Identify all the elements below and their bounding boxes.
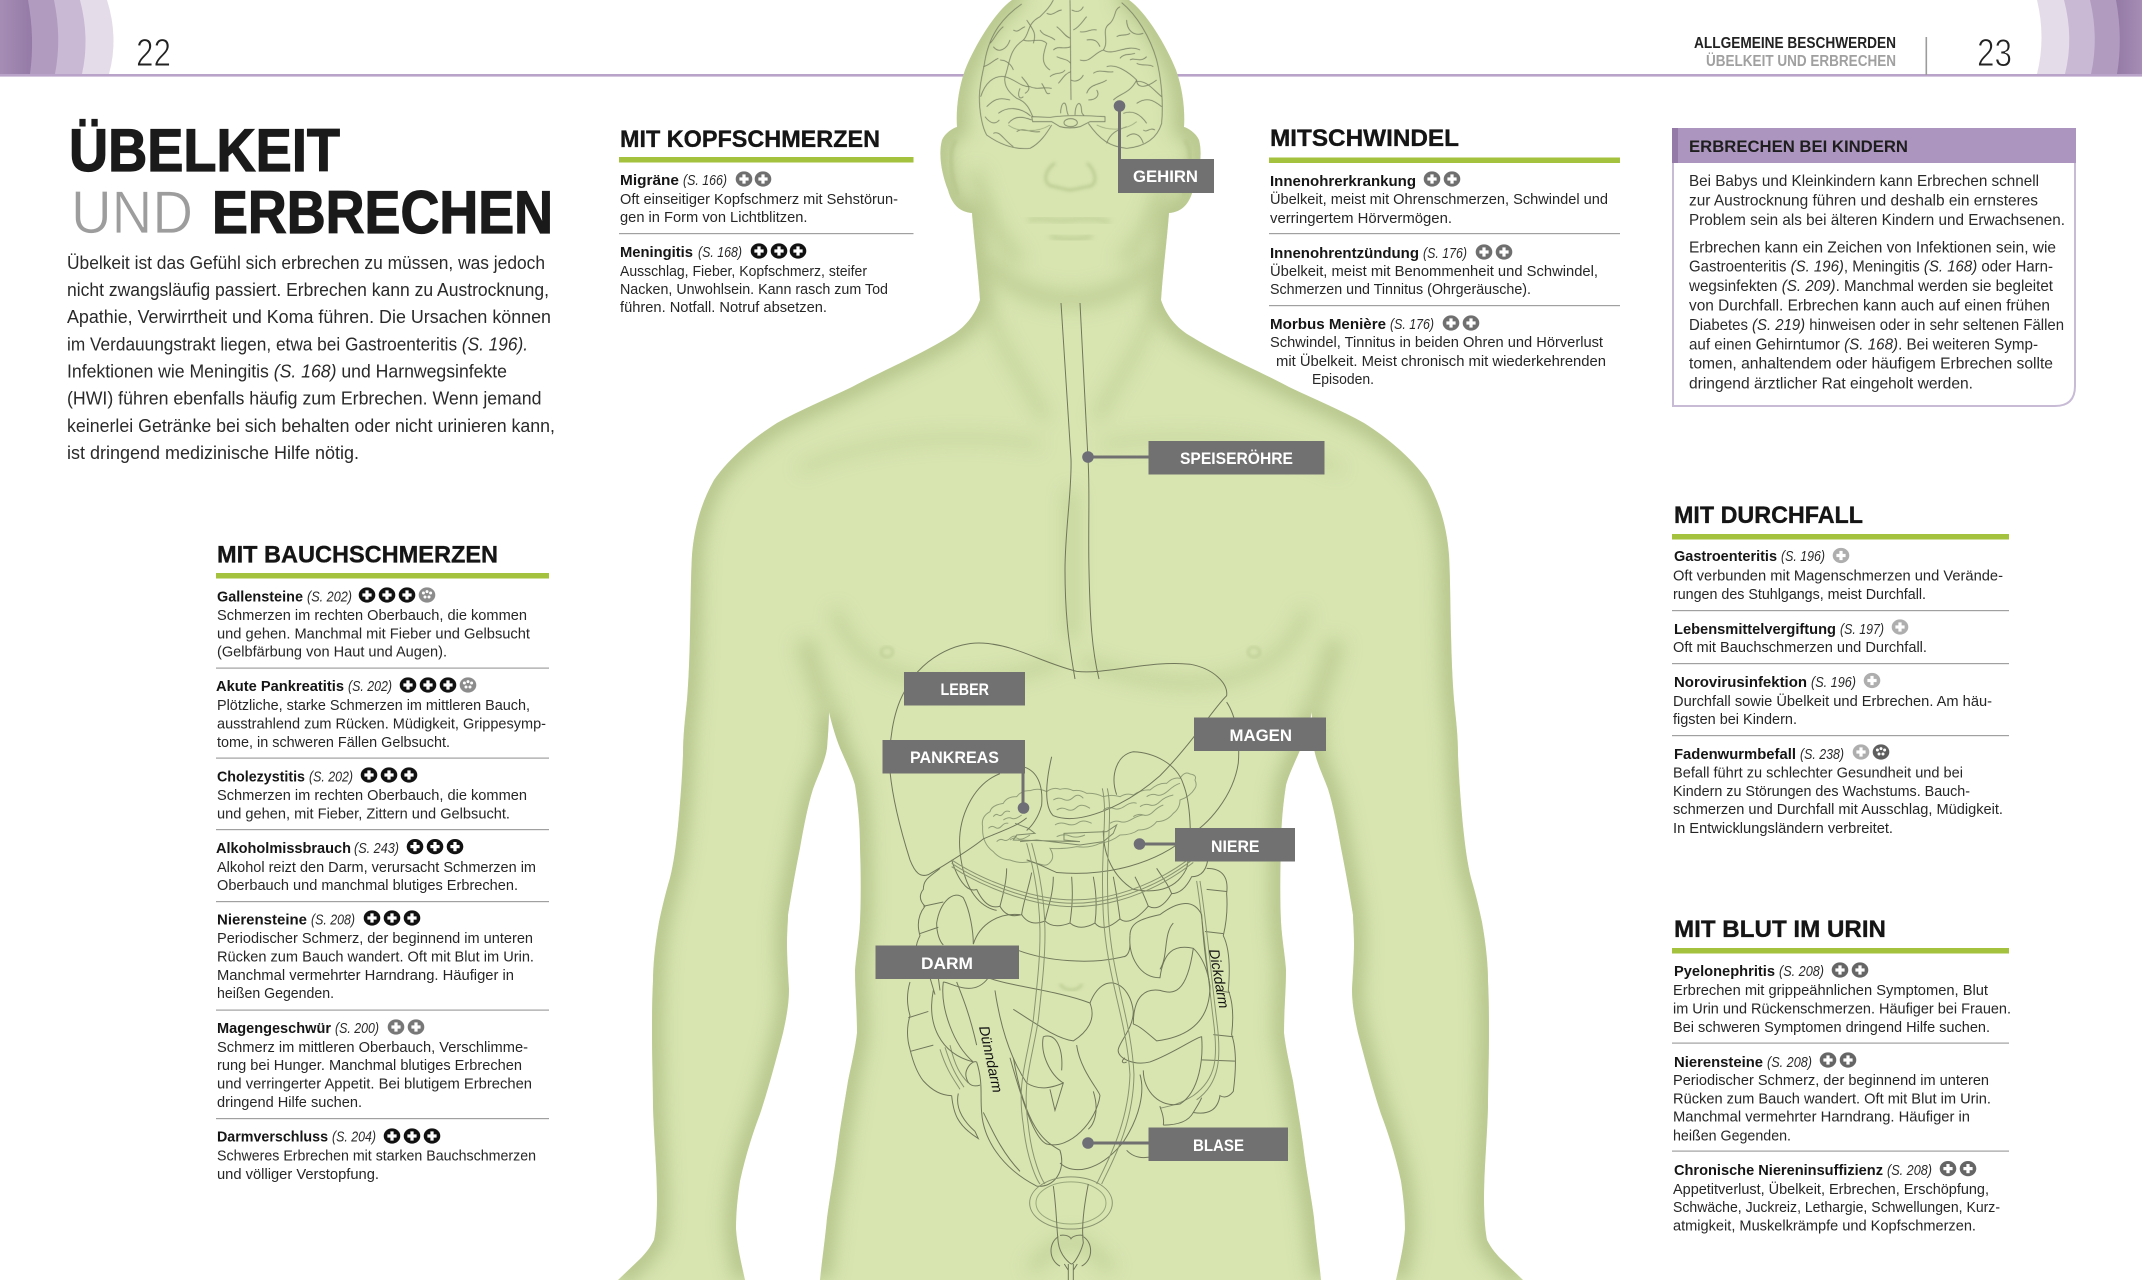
entry: Magengeschwür: und verringerter Appetit. Bei blutigem Erbrechen [217, 1076, 532, 1092]
entry: Pyelonephritis [1673, 962, 2011, 1036]
entry: Innenohrentzündung: Schmerzen und Tinnitus (Ohrgeräusche). [1270, 281, 1531, 298]
transverse colon [977, 856, 1208, 927]
heading: Mit Schwindel: MITSCHWINDEL [1270, 125, 1459, 152]
entry: Magengeschwür: Schmerz im mittleren Oberbauch, Verschlimme- [217, 1039, 528, 1056]
entry: Gastroenteritis [1673, 548, 2003, 603]
box text: tomen, anhaltendem oder häufigem Erbrechen sollte [1689, 356, 2053, 373]
entry: Nierensteine: Periodischer Schmerz, der beginnend im unteren [1673, 1072, 1989, 1089]
entry: Morbus Menière: (S. 176) [1390, 317, 1434, 333]
entry: Meningitis [620, 243, 888, 316]
entry: Nierensteine: Nierensteine [217, 912, 307, 929]
entry: Cholezystitis [217, 767, 527, 822]
entry: Gastroenteritis: rungen des Stuhlgangs, meist Durchfall. [1673, 586, 1926, 603]
entry: Cholezystitis: und gehen, mit Fieber, Zittern und Gelbsucht. [217, 805, 510, 822]
entry: Fadenwurmbefall: Befall führt zu schlechter Gesundheit und bei [1673, 764, 1963, 782]
intro text: ist dringend medizinische Hilfe nötig. [67, 442, 359, 463]
label: Speiseröhre [1082, 441, 1324, 474]
entry: Alkoholmissbrauch: Oberbauch und manchmal blutiges Erbrechen. [217, 877, 518, 894]
panel: Mit Blut im Urin [1672, 916, 2011, 1235]
organ name: Dünndarm: Dünndarm [975, 1025, 1005, 1094]
entry: Darmverschluss: Schweres Erbrechen mit starken Bauchschmerzen [217, 1148, 536, 1164]
title [69, 117, 553, 246]
heading: Mit Kopfschmerzen: MIT KOPFSCHMERZEN [620, 126, 880, 153]
entry: Innenohrerkrankung: Innenohrerkrankung [1270, 173, 1416, 190]
heading: Mit Blut im Urin: MIT BLUT IM URIN [1674, 916, 1886, 943]
entry: Alkoholmissbrauch: Alkoholmissbrauch [216, 840, 351, 857]
entry: Nierensteine: (S. 208) [311, 913, 355, 929]
entry: Pyelonephritis: Bei schweren Symptomen dringend Hilfe suchen. [1673, 1019, 1990, 1036]
entry: Gastroenteritis: (S. 196) [1781, 549, 1825, 565]
box text: Diabetes (S. 219) hinweisen oder in sehr seltenen Fällen [1689, 317, 2064, 334]
entry: Chronische Niereninsuffizienz: Schwäche, Juckreiz, Lethargie, Schwellungen, Kurz- [1673, 1199, 2000, 1216]
entry: Norovirusinfektion: Norovirusinfektion [1674, 674, 1807, 691]
entry: Alkoholmissbrauch: Alkohol reizt den Darm, verursacht Schmerzen im [217, 859, 536, 876]
running head [1694, 35, 1927, 75]
entry: Migräne: (S. 166) [683, 173, 727, 189]
running head: ÜBELKEIT UND ERBRECHEN [1706, 53, 1896, 70]
label: Leber: LEBER [940, 681, 989, 699]
label: Darm [876, 946, 1019, 979]
label: Gehirn [1114, 100, 1214, 193]
intro text: Apathie, Verwirrtheit und Koma führen. Die Ursachen können [67, 306, 551, 327]
right kidney and gallbladder [960, 774, 1000, 910]
box text: von Durchfall. Erbrechen kann auch auf einen frühen [1689, 297, 2050, 314]
label: Pankreas: PANKREAS [910, 749, 999, 767]
entry: Magengeschwür [217, 1019, 532, 1111]
entry: Akute Pankreatitis: Plötzliche, starke Schmerzen im mittleren Bauch, [217, 697, 530, 714]
entry: Fadenwurmbefall: schmerzen und Durchfall mit Ausschlag, Müdigkeit. [1673, 801, 2003, 818]
entry: Gallensteine: (Gelbfärbung von Haut und Augen). [217, 644, 447, 661]
panel: Mit Kopfschmerzen [619, 126, 914, 316]
panel: Mit Bauchschmerzen [216, 542, 549, 1183]
entry: Fadenwurmbefall [1673, 744, 2003, 837]
entry: Chronische Niereninsuffizienz: (S. 208) [1887, 1163, 1932, 1179]
heading: Mit Bauchschmerzen: MIT BAUCHSCHMERZEN [217, 542, 498, 568]
entry: Innenohrerkrankung: verringertem Hörvermögen. [1270, 210, 1452, 227]
box text: wegsinfekten (S. 209). Manchmal werden sie begleitet [1688, 278, 2054, 295]
entry: Darmverschluss: (S. 204) [332, 1130, 376, 1146]
entry: Morbus Menière: mit Übelkeit. Meist chronisch mit wiederkehrenden [1276, 352, 1606, 370]
entry: Lebensmittelvergiftung: Oft mit Bauchschmerzen und Durchfall. [1673, 639, 1927, 656]
entry: Innenohrerkrankung: Übelkeit, meist mit Ohrenschmerzen, Schwindel und [1270, 190, 1608, 208]
entry: Norovirusinfektion: figsten bei Kindern. [1673, 711, 1797, 728]
entry: Innenohrentzündung: Übelkeit, meist mit Benommenheit und Schwindel, [1270, 262, 1598, 280]
label: Gehirn: GEHIRN [1133, 168, 1198, 186]
entry: Morbus Menière: Episoden. [1312, 371, 1374, 388]
box text: zur Austrocknung führen und deshalb ein ernsteres [1689, 193, 2038, 210]
intro text: Infektionen wie Meningitis (S. 168) und Harnwegsinfekte [67, 360, 507, 382]
entry: Nierensteine [217, 910, 534, 1002]
entry: Migräne [620, 171, 898, 226]
panel: Mit Durchfall [1672, 502, 2009, 837]
entry: Norovirusinfektion: (S. 196) [1811, 675, 1856, 691]
label: Blase [1082, 1128, 1288, 1161]
title: UND [71, 179, 193, 246]
decoration: right purple tabs [2037, 0, 2142, 74]
entry: Darmverschluss: Darmverschluss [217, 1128, 328, 1146]
face details [881, 140, 1260, 990]
entry: Cholezystitis: Cholezystitis [217, 768, 305, 786]
intro text: im Verdauungstrakt liegen, etwa bei Gastroenteritis (S. 196). [67, 334, 528, 354]
organ name: Dickdarm: Dickdarm [1205, 948, 1231, 1010]
entry: Chronische Niereninsuffizienz [1673, 1161, 2000, 1235]
ureters [1021, 843, 1040, 1184]
entry: Gallensteine [217, 587, 531, 661]
entry: Meningitis: (S. 168) [698, 245, 742, 261]
stomach [1027, 702, 1239, 873]
title: ERBRECHEN [212, 179, 553, 246]
label: Speiseröhre: SPEISERÖHRE [1180, 449, 1293, 468]
entry: Meningitis: Meningitis [620, 244, 693, 261]
running head: ALLGEMEINE BESCHWERDEN [1694, 35, 1896, 52]
ascending colon [907, 868, 952, 1096]
entry: Morbus Menière [1270, 315, 1606, 388]
entry: Chronische Niereninsuffizienz: atmigkeit, Muskelkrämpfe und Kopfschmerzen. [1673, 1218, 1976, 1235]
entry: Magengeschwür: rung bei Hunger. Manchmal blutiges Erbrechen [217, 1057, 522, 1074]
entry: Akute Pankreatitis: (S. 202) [348, 679, 392, 695]
entry: Pyelonephritis: Erbrechen mit grippeähnlichen Symptomen, Blut [1673, 982, 1989, 999]
entry: Gallensteine: Schmerzen im rechten Oberbauch, die kommen [217, 607, 527, 624]
small intestine [973, 914, 1020, 944]
entry: Darmverschluss [217, 1128, 536, 1183]
bladder [1030, 1177, 1112, 1229]
entry: Pyelonephritis: Pyelonephritis [1674, 963, 1775, 980]
entry: Meningitis: Ausschlag, Fieber, Kopfschmerz, steifer [620, 263, 867, 280]
entry: Darmverschluss: und völliger Verstopfung. [217, 1166, 379, 1183]
entry: Akute Pankreatitis: tome, in schweren Fällen Gelbsucht. [217, 734, 450, 751]
intro text: (HWI) führen ebenfalls häufig zum Erbrechen. Wenn jemand [67, 388, 542, 408]
label: Niere [1134, 828, 1295, 862]
entry: Alkoholmissbrauch [216, 839, 536, 894]
entry: Chronische Niereninsuffizienz: Chronische Niereninsuffizienz [1674, 1162, 1883, 1179]
intro text: keinerlei Getränke bei sich behalten oder nicht urinieren kann, [67, 415, 555, 436]
pancreas [982, 773, 1196, 865]
entry: Morbus Menière: Morbus Menière [1270, 316, 1386, 333]
entry: Magengeschwür: dringend Hilfe suchen. [217, 1094, 362, 1111]
entry: Lebensmittelvergiftung [1673, 619, 1927, 656]
entry: Magengeschwür: (S. 200) [335, 1021, 379, 1037]
entry: Gallensteine: (S. 202) [307, 590, 352, 606]
box text: Bei Babys und Kleinkindern kann Erbrechen schnell [1689, 173, 2039, 190]
entry: Lebensmittelvergiftung: Lebensmittelvergiftung [1674, 621, 1836, 638]
box text: dringend ärztlicher Rat eingeholt werden. [1689, 375, 1973, 392]
entry: Cholezystitis: (S. 202) [309, 770, 353, 786]
label: Magen [1194, 718, 1326, 751]
title: ÜBELKEIT [69, 117, 340, 184]
entry: Meningitis: Nacken, Unwohlsein. Kann rasch zum Tod [620, 281, 888, 298]
entry: Gastroenteritis: Oft verbunden mit Magenschmerzen und Verände- [1673, 568, 2003, 585]
label: Darm: DARM [921, 955, 973, 973]
box text: Problem sein als bei älteren Kindern und Erwachsenen. [1689, 212, 2065, 229]
entry: Akute Pankreatitis: Akute Pankreatitis [216, 678, 344, 695]
entry: Pyelonephritis: (S. 208) [1779, 964, 1824, 980]
panel: Mit Schwindel [1269, 125, 1620, 388]
label: Leber [904, 672, 1025, 706]
entry: Nierensteine: Rücken zum Bauch wandert. Oft mit Blut im Urin. [1673, 1091, 1991, 1108]
box text: Gastroenteritis (S. 196), Meningitis (S. 168) oder Harn- [1689, 259, 2053, 276]
intro text: nicht zwangsläufig passiert. Erbrechen kann zu Austrocknung, [67, 279, 549, 300]
entry: Nierensteine: Periodischer Schmerz, der beginnend im unteren [217, 930, 533, 947]
box text: Erbrechen kann ein Zeichen von Infektionen sein, wie [1689, 239, 2056, 256]
box text [1688, 173, 2065, 392]
entry: Lebensmittelvergiftung: (S. 197) [1840, 622, 1884, 638]
intro text [67, 252, 555, 463]
entry: Nierensteine: Manchmal vermehrter Harndrang. Häufiger in [1673, 1109, 1970, 1126]
entry: Chronische Niereninsuffizienz: Appetitverlust, Übelkeit, Erbrechen, Erschöpfung, [1673, 1180, 1989, 1198]
label: Blase: BLASE [1193, 1137, 1244, 1155]
entry: Gallensteine: Gallensteine [217, 588, 303, 606]
heading: Erbrechen bei Kindern: ERBRECHEN BEI KINDERN [1689, 137, 1908, 156]
left kidney / spleen [1103, 752, 1190, 891]
entry: Fadenwurmbefall: Fadenwurmbefall [1674, 746, 1796, 763]
entry: Cholezystitis: Schmerzen im rechten Oberbauch, die kommen [217, 787, 527, 804]
entry: Magengeschwür: Magengeschwür [217, 1020, 331, 1037]
entry: Migräne: Migräne [620, 172, 679, 189]
entry: Meningitis: führen. Notfall. Notruf absetzen. [620, 299, 827, 316]
label: Niere: NIERE [1211, 838, 1260, 856]
label: Pankreas [882, 740, 1029, 814]
entry: Migräne: Oft einseitiger Kopfschmerz mit Sehstörun- [620, 191, 898, 208]
entry: Norovirusinfektion: Durchfall sowie Übelkeit und Erbrechen. Am häu- [1673, 692, 1992, 710]
entry: Gastroenteritis: Gastroenteritis [1674, 548, 1777, 565]
entry: Alkoholmissbrauch: (S. 243) [354, 841, 399, 857]
label: Magen: MAGEN [1230, 727, 1292, 745]
entry: Fadenwurmbefall: In Entwicklungsländern verbreitet. [1673, 820, 1893, 837]
entry: Akute Pankreatitis [216, 677, 546, 751]
header rule [0, 74, 2142, 77]
entry: Migräne: gen in Form von Lichtblitzen. [620, 209, 808, 226]
box text: auf einen Gehirntumor (S. 168). Bei weiteren Symp- [1689, 336, 2038, 353]
entry: Gallensteine: und gehen. Manchmal mit Fieber und Gelbsucht [217, 625, 531, 642]
descending colon [1163, 868, 1235, 1125]
entry: Nierensteine: Rücken zum Bauch wandert. Oft mit Blut im Urin. [217, 948, 534, 966]
entry: Fadenwurmbefall: Kindern zu Störungen des Wachstums. Bauch- [1673, 783, 1970, 800]
entry: Innenohrentzündung: (S. 176) [1423, 246, 1467, 262]
entry: Akute Pankreatitis: ausstrahlend zum Rücken. Müdigkeit, Grippesymp- [217, 716, 546, 733]
entry: Nierensteine: Nierensteine [1674, 1054, 1763, 1071]
digestive organs line drawing [890, 643, 1239, 1280]
entry: Innenohrerkrankung [1270, 171, 1608, 227]
entry: Morbus Menière: Schwindel, Tinnitus in beiden Ohren und Hörverlust [1270, 334, 1604, 351]
liver [903, 643, 1227, 818]
decoration: left purple tabs [0, 0, 114, 74]
brain outline [979, 0, 1162, 149]
entry: Nierensteine: Manchmal vermehrter Harndrang. Häufiger in [217, 967, 514, 984]
oesophagus lines [1061, 303, 1099, 679]
heading: Mit Durchfall: MIT DURCHFALL [1674, 502, 1863, 529]
human body illustration [618, 0, 1523, 1280]
page number 22: 22 [136, 32, 171, 75]
page number 23: 23 [1977, 32, 2012, 75]
intro text: Übelkeit ist das Gefühl sich erbrechen zu müssen, was jedoch [67, 252, 545, 273]
entry: Nierensteine [1673, 1052, 1991, 1144]
entry: Innenohrentzündung [1270, 244, 1598, 298]
entry: Nierensteine: heißen Gegenden. [1673, 1128, 1791, 1144]
entry: Innenohrentzündung: Innenohrentzündung [1270, 245, 1419, 262]
panel: Erbrechen bei Kindern [1672, 128, 2076, 406]
entry: Nierensteine: (S. 208) [1767, 1055, 1812, 1071]
entry: Fadenwurmbefall: (S. 238) [1800, 747, 1844, 763]
entry: Norovirusinfektion [1673, 673, 1992, 728]
entry: Nierensteine: heißen Gegenden. [217, 985, 334, 1002]
entry: Pyelonephritis: im Urin und Rückenschmerzen. Häufiger bei Frauen. [1673, 1000, 2011, 1018]
